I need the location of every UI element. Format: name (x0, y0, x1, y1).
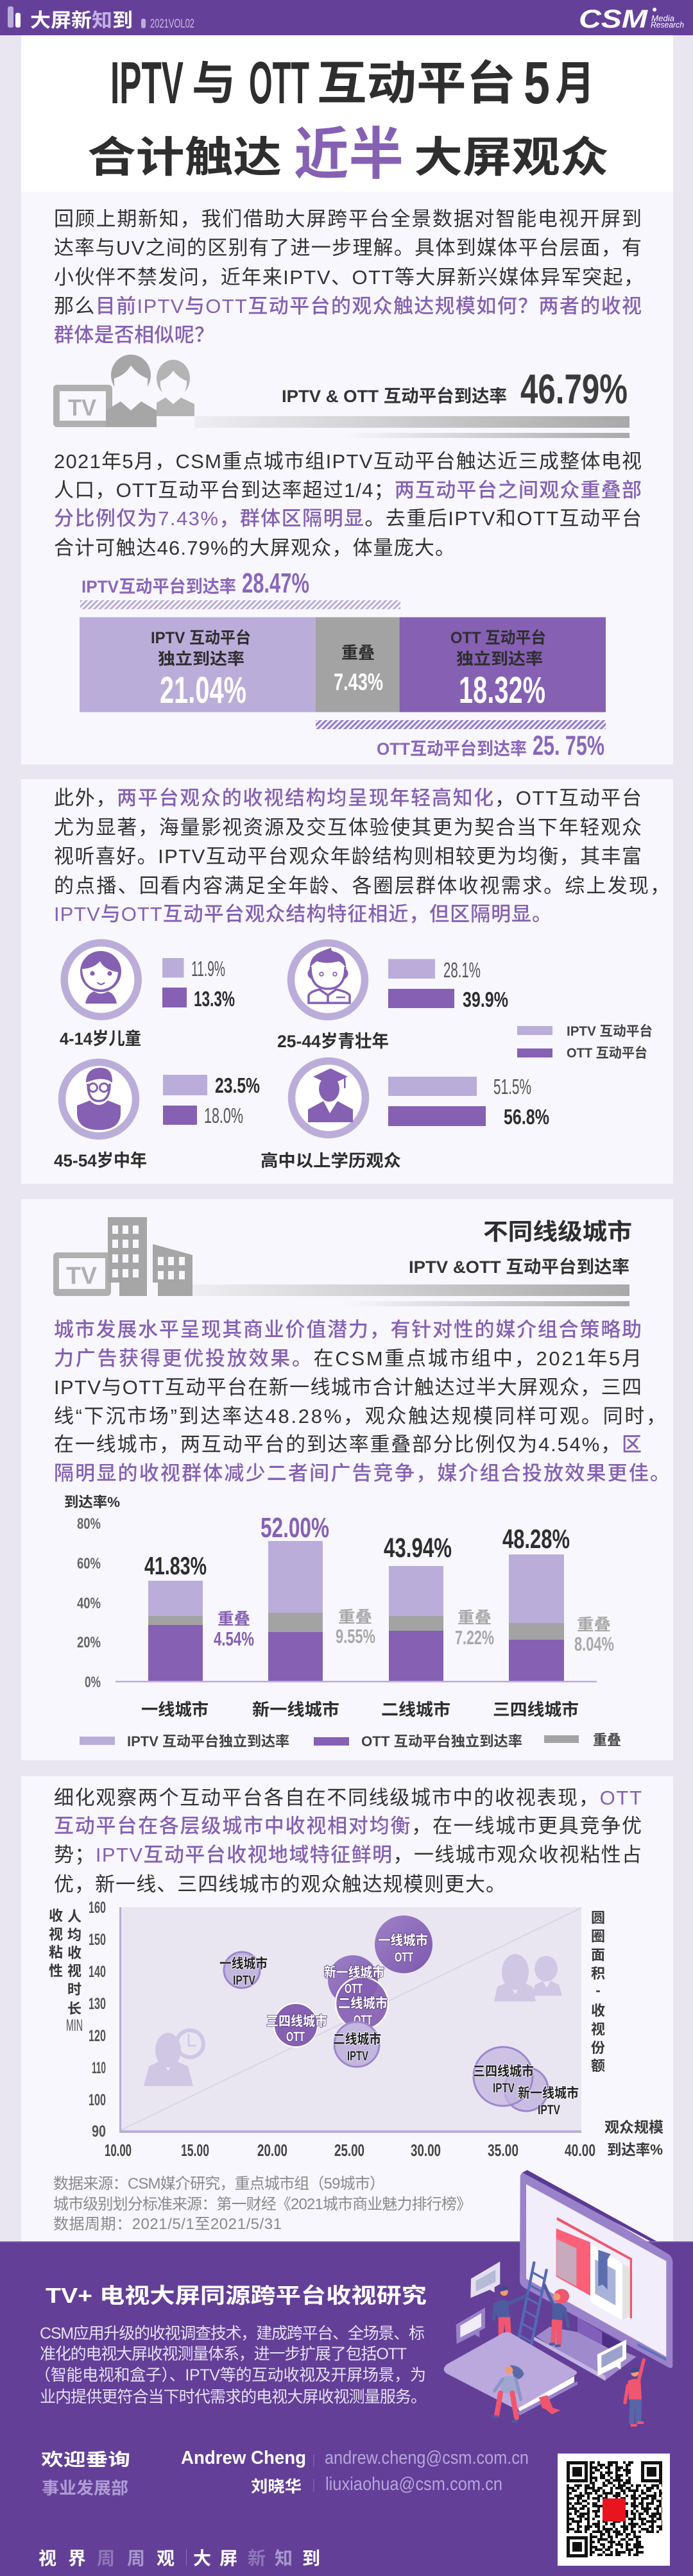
issue number: 2021VOL02 (150, 17, 194, 31)
intro paragraph: 回顾上期新知，我们借助大屏跨平台全景数据对智能电视开屏到 (54, 208, 642, 230)
icon: graduate (291, 1061, 366, 1135)
CSM logo: Research (651, 20, 684, 29)
contact: Liu Xiaohua: 刘晓华 (251, 2478, 302, 2496)
paragraph: stickiness (54, 1787, 642, 1896)
bubble: tier 3-4 OTT (266, 2003, 327, 2047)
bar: new tier 1 cities (261, 1512, 375, 1681)
y axis ticks: 160 (89, 1899, 106, 1917)
series name: 大屏新知到 (30, 10, 133, 31)
data sources: 城市级别划分标准来源：第一财经《2021城市商业魅力排行榜》 (53, 2196, 472, 2213)
contact: Andrew Cheng: andrew.cheng@csm.com.cn (325, 2448, 529, 2468)
decorative gradient bars (194, 416, 629, 438)
contact heading (41, 2450, 130, 2498)
x axis labels: 一线城市 (141, 1700, 209, 1719)
x axis ticks: 30.00 (411, 2141, 441, 2160)
title line 1: OTT (249, 49, 309, 116)
group: middle-aged 45-54: 18.0% (204, 1104, 243, 1127)
bubble: tier 3-4 OTT: 三四线城市 (266, 2014, 327, 2029)
panel: scale and stickiness (21, 1776, 673, 2241)
right axis title: bubble area: 份 (591, 2040, 605, 2056)
ladder (518, 2262, 547, 2349)
bar: new tier 1 cities: 52.00% (261, 1512, 329, 1544)
y axis labels: 60% (77, 1555, 101, 1572)
icon: viewer with clock (144, 2030, 203, 2086)
label: 25-44岁青壮年 (277, 1032, 389, 1051)
bar: tier 2 cities: 重叠 (458, 1609, 492, 1627)
footer panel (0, 2241, 693, 2576)
legend: platforms: IPTV 互动平台 (567, 1023, 653, 1039)
y axis labels: 40% (77, 1595, 101, 1612)
label: 4-14岁儿童 (60, 1029, 141, 1048)
icon: two viewers (494, 1954, 562, 2001)
bubble: tier 2 OTT: OTT (354, 2013, 372, 2028)
x axis title: 到达率% (607, 2141, 663, 2158)
bubble: tier 2 IPTV: IPTV (347, 2049, 368, 2064)
icon: child (64, 943, 138, 1016)
title line 1: 月 (555, 58, 595, 110)
footer description: 业内提供更符合当下时代需求的电视大屏收视测量服务。 (40, 2388, 427, 2406)
y axis ticks: 110 (92, 2059, 106, 2077)
x axis title (604, 2119, 663, 2158)
QR code (558, 2454, 670, 2566)
intro paragraph: 那么目前IPTV与OTT互动平台的观众触达规模如何？两者的收视 (54, 295, 642, 317)
x axis title: 观众规模 (604, 2119, 663, 2135)
bar: tier 2 cities (384, 1533, 494, 1681)
bar: tier 1 cities: 重叠 (218, 1610, 250, 1628)
y axis labels (77, 1515, 101, 1691)
y axis labels: 80% (77, 1515, 101, 1533)
stacked bar chart: reach by city tier (64, 1494, 621, 1749)
bubble: tier 2 IPTV (333, 2022, 381, 2067)
plot area (119, 1907, 581, 2133)
segment: OTT only: 独立到达率 (456, 650, 543, 668)
segment: IPTV only: 21.04% (160, 669, 246, 711)
group: high school and above (261, 1061, 549, 1170)
paragraph: city tiers: IPTV与OTT互动平台在新一线城市合计触达过半大屏观众，三四 (54, 1376, 642, 1399)
x axis ticks: 20.00 (257, 2141, 287, 2160)
panel: total reach (21, 192, 673, 764)
data sources (53, 2175, 472, 2233)
footer heading: TV+ 电视大屏同源跨平台收视研究 (46, 2284, 427, 2307)
left axis title: stickiness: 长 (67, 2001, 81, 2017)
right axis title: bubble area (591, 1910, 605, 2074)
contact: Liu Xiaohua: liuxiaohua@csm.com.cn (325, 2474, 502, 2495)
panel: audience structure (21, 779, 673, 1184)
group: adults 25-44 (277, 943, 508, 1051)
bubble: tier 2 OTT: 新一线城市 (324, 1965, 384, 1980)
right axis title: bubble area: 收 (591, 2003, 605, 2019)
bar: tier 1 cities: 4.54% (214, 1628, 254, 1650)
title line 1: 与 (192, 58, 235, 110)
bubble: tier 1 OTT: OTT (395, 1950, 413, 1965)
title line 1: 5 (524, 49, 550, 116)
OTT total reach label: 25. 75% (533, 730, 604, 761)
OTT total reach label (377, 730, 604, 761)
segment: overlap: 重叠 (341, 643, 375, 662)
right axis title: bubble area: 积 (591, 1966, 605, 1982)
paragraph: reach and overlap: 人口，OTT互动平台到达率超过1/4；两互动平台之间观众重叠部 (54, 479, 642, 501)
footer description: CSM应用升级的收视调查技术，建成跨平台、全场景、标 (40, 2325, 425, 2343)
monitor stand and base (533, 2317, 637, 2381)
paragraph: reach and overlap: 2021年5月，CSM重点城市组IPTV互动平台触达近三成整体电视 (54, 450, 642, 473)
left axis title: stickiness: 均 (67, 1927, 81, 1943)
icon: TV and two viewers: TV (68, 394, 96, 421)
paragraph: stickiness: 优，新一线、三四线城市的观众触达规模则更大。 (54, 1873, 506, 1896)
left axis title: stickiness: 性 (49, 1963, 63, 1979)
y axis title: 到达率% (64, 1494, 120, 1510)
left axis title: stickiness: 收 (49, 1908, 63, 1924)
left axis title: stickiness: 人 (67, 1908, 81, 1924)
bubble: tier 3-4 IPTV: 三四线城市 (473, 2064, 534, 2079)
right axis title: bubble area: 圈 (591, 1928, 605, 1944)
y axis labels: 0% (85, 1674, 101, 1691)
paragraph: reach and overlap: 合计可触达46.79%的大屏观众，体量庞大。 (54, 537, 455, 559)
y axis ticks: 120 (89, 2027, 106, 2045)
paragraph: audience structure: IPTV与OTT互动平台观众结构特征相近，但区隔明显。 (54, 903, 552, 925)
segment: OTT only: OTT 互动平台 (450, 628, 546, 647)
paragraph: stickiness: 细化观察两个互动平台各自在不同线级城市中的收视表现，OTT (54, 1787, 642, 1809)
title line 1: IPTV (110, 49, 184, 116)
paragraph: audience structure: 此外，两平台观众的收视结构均呈现年轻高知化，OTT互动平台 (54, 787, 642, 809)
footer slogan: 大屏 新 知 到 (193, 2548, 320, 2568)
segment: IPTV only (80, 617, 316, 712)
paragraph: city tiers: 力广告获得更优投放效果。在CSM重点城市组中，2021年5月 (54, 1347, 642, 1370)
x axis ticks: 40.00 (565, 2141, 595, 2160)
x axis labels: 二线城市 (381, 1700, 450, 1719)
y axis ticks (89, 1899, 106, 2141)
contact: Andrew Cheng: Andrew Cheng (181, 2448, 306, 2468)
illustration: monitor, book and people (444, 2170, 672, 2427)
left axis title: stickiness (49, 1908, 83, 2035)
total reach value: 46.79% (520, 366, 628, 412)
bar: tier 1 cities (144, 1553, 254, 1681)
paragraph: city tiers: 线“下沉市场”到达率达48.28%，观众触达规模同样可观。同时， (54, 1405, 666, 1427)
segment: IPTV only: IPTV 互动平台 (151, 628, 251, 647)
group: middle-aged 45-54: 23.5% (215, 1073, 260, 1097)
data sources: 数据周期：2021/5/1至2021/5/31 (53, 2216, 282, 2233)
bar: tier 3-4 cities: 重叠 (577, 1616, 611, 1634)
title line 1: 互动平台 (317, 58, 516, 110)
left axis title: stickiness: 视 (49, 1926, 63, 1942)
bubble: new tier 1 IPTV (504, 2067, 548, 2111)
legend: platforms (517, 1023, 653, 1061)
paragraph: audience structure: 尤为显著，海量影视资源及交互体验使其更为契合当下年轻观众 (54, 816, 642, 839)
footer description: 准化的电视大屏收视测量体系，进一步扩展了包括OTT (40, 2345, 407, 2363)
bar: tier 2 cities: 7.22% (455, 1626, 494, 1649)
paragraph: stickiness: 互动平台在各层级城市中收视相对均衡，在一线城市更具竞争优 (54, 1815, 642, 1837)
bubble: tier 2 OTT (324, 1965, 388, 2030)
legend: IPTV 互动平台独立到达率 (127, 1733, 289, 1749)
subheading: IPTV &OTT 互动平台到达率 (409, 1257, 629, 1277)
bar: tier 3-4 cities (502, 1524, 614, 1681)
title line 2: 合计触达 (87, 133, 282, 181)
icon: TV and city buildings (53, 1217, 193, 1296)
bubble: tier 1 IPTV (219, 1952, 268, 1988)
footer slogan: 视界 周 周 观 (38, 2548, 175, 2568)
legend: OTT 互动平台独立到达率 (361, 1733, 522, 1749)
IPTV total reach label: 28.47% (242, 568, 309, 599)
data sources: 数据来源：CSM媒介研究，重点城市组（59城市） (53, 2175, 385, 2193)
contact heading: 事业发展部 (42, 2479, 128, 2498)
panel: title (21, 35, 673, 192)
person: woman with red hair (544, 2285, 569, 2347)
legend: 重叠 (593, 1732, 621, 1748)
OTT total reach label: OTT互动平台到达率 (377, 739, 527, 759)
left axis title: stickiness: MIN (66, 2016, 83, 2035)
y axis ticks: 130 (89, 1995, 106, 2013)
bubble: tier 3-4 IPTV: 新一线城市 (518, 2085, 579, 2101)
bar: tier 3-4 cities: 48.28% (502, 1524, 570, 1554)
bar: new tier 1 cities: 重叠 (338, 1608, 372, 1626)
group: high school and above: 56.8% (504, 1105, 549, 1129)
y axis ticks: 140 (89, 1963, 106, 1981)
bubble: tier 3-4 IPTV (473, 2047, 579, 2117)
bar: tier 1 cities: 41.83% (144, 1553, 207, 1580)
IPTV total reach label (81, 568, 309, 599)
x axis ticks: 10.00 (105, 2141, 132, 2160)
segment: OTT only (400, 617, 606, 712)
paragraph: reach and overlap (54, 450, 642, 559)
x axis ticks: 35.00 (488, 2141, 518, 2160)
paragraph: city tiers (54, 1318, 670, 1485)
segment: OTT only: 18.32% (459, 669, 545, 711)
intro paragraph: 小伙伴不禁发问，近年来IPTV、OTT等大屏新兴媒体异军突起， (54, 266, 644, 289)
bubble: tier 2 OTT: 二线城市 (338, 1996, 388, 2011)
icon: TV and city buildings: TV (66, 1263, 98, 1290)
segment: overlap: 7.43% (334, 669, 383, 695)
segment: overlap (316, 617, 400, 712)
group: children 4-14: 13.3% (194, 987, 235, 1011)
bubble: tier 1 IPTV: IPTV (233, 1973, 255, 1988)
left axis title: stickiness: 时 (67, 1982, 81, 1998)
bubble: new tier 1 OTT (328, 1955, 378, 2005)
legend: platforms: OTT 互动平台 (567, 1045, 647, 1061)
intro paragraph: 群体是否相似呢？ (54, 324, 214, 346)
person: man waving (625, 2360, 644, 2427)
group: children 4-14 (60, 943, 235, 1048)
x axis ticks (105, 2141, 595, 2160)
icon: middle-aged person with glasses (62, 1062, 136, 1136)
label: 45-54岁中年 (54, 1151, 147, 1170)
paragraph: reach and overlap: 分比例仅为7.43%，群体区隔明显。去重后IPTV和OTT互动平台 (54, 507, 642, 530)
title line 1 (110, 49, 595, 116)
paragraph: audience structure: 的点播、回看内容满足全年龄、各圈层群体收视需求。综上发现， (54, 875, 670, 897)
heading: 不同线级城市 (483, 1218, 632, 1245)
paragraph: audience structure: 视听喜好。IPTV互动平台观众年龄结构则相较更为均衡，其丰富 (54, 845, 642, 868)
speech bubbles (456, 2262, 626, 2376)
y axis labels: 20% (77, 1634, 101, 1651)
contact: Liu Xiaohua (251, 2474, 502, 2496)
bar: tier 3-4 cities: 8.04% (574, 1633, 614, 1655)
left axis title: stickiness: 粘 (49, 1944, 63, 1960)
icon: TV and two viewers (53, 355, 194, 427)
bubble: tier 1 OTT (375, 1915, 432, 1973)
icon: young adult (291, 943, 364, 1017)
segmented reach bar (80, 617, 606, 712)
person: man holding ladder (493, 2286, 526, 2345)
left axis title: stickiness: 视 (67, 1963, 81, 1979)
label: 高中以上学历观众 (261, 1151, 401, 1170)
open book on screen (556, 2217, 632, 2320)
x axis labels (141, 1700, 579, 1719)
right axis title: bubble area: - (595, 1982, 601, 1998)
x axis labels: 三四线城市 (493, 1700, 579, 1719)
segment: IPTV only: 独立到达率 (158, 650, 244, 668)
y axis ticks: 150 (89, 1931, 106, 1949)
right axis title: bubble area: 圆 (591, 1910, 605, 1926)
title line 2: 近半 (294, 122, 404, 186)
paragraph: stickiness: 势；IPTV互动平台收视地域特征鲜明，一线城市观众收视粘性占 (54, 1844, 642, 1866)
panel: city tiers (21, 1199, 673, 1760)
x axis ticks: 15.00 (181, 2141, 209, 2160)
footer slogan (38, 2548, 320, 2568)
footer description (35, 2325, 427, 2406)
header bar (0, 0, 693, 35)
paragraph: city tiers: 城市发展水平呈现其商业价值潜力，有针对性的媒介组合策略助 (54, 1318, 642, 1341)
large book platform (444, 2332, 578, 2416)
bubble: tier 3-4 IPTV: IPTV (493, 2081, 515, 2096)
y axis ticks: 90 (92, 2123, 106, 2141)
bubble: tier 1 OTT: 一线城市 (378, 1933, 428, 1948)
bubble: tier 3-4 IPTV: IPTV (538, 2103, 560, 2117)
group: high school and above: 51.5% (493, 1075, 531, 1099)
person: seated woman (492, 2365, 524, 2423)
title line 2: 大屏观众 (414, 133, 609, 181)
right axis title: bubble area: 额 (591, 2058, 605, 2074)
bubble: tier 3-4 OTT: OTT (286, 2030, 305, 2044)
IPTV total reach label: IPTV互动平台到达率 (81, 577, 236, 596)
bar: new tier 1 cities: 9.55% (336, 1625, 375, 1647)
monitor (520, 2170, 672, 2368)
group: adults 25-44: 28.1% (443, 958, 481, 982)
contact: Andrew Cheng (181, 2448, 529, 2468)
title line 2 (87, 122, 609, 186)
CSM logo (579, 5, 684, 33)
bubble: tier 2 OTT: OTT (345, 1982, 363, 1996)
group: children 4-14: 11.9% (191, 957, 225, 981)
y axis ticks: 100 (89, 2091, 106, 2109)
x axis labels: 新一线城市 (252, 1700, 339, 1719)
left axis title: stickiness: 收 (67, 1945, 81, 1961)
paragraph: city tiers: 隔明显的收视群体减少二者间广告竞争，媒介组合投放效果更佳。 (54, 1462, 670, 1485)
legend (80, 1732, 621, 1749)
decorative gradient bars (193, 1284, 629, 1306)
group: adults 25-44: 39.9% (463, 988, 508, 1011)
x axis ticks: 25.00 (334, 2141, 364, 2160)
intro paragraph (54, 208, 644, 346)
bar: tier 2 cities: 43.94% (384, 1533, 452, 1563)
paragraph: audience structure (54, 787, 670, 925)
group: middle-aged 45-54 (54, 1062, 260, 1170)
intro paragraph: 达率与UV之间的区别有了进一步理解。具体到媒体平台层面，有 (54, 237, 642, 259)
bubble: tier 1 IPTV: 一线城市 (219, 1956, 268, 1971)
footer description: （智能电视和盒子）、IPTV等的互动收视及开屏场景，为 (35, 2366, 426, 2384)
total reach label: IPTV & OTT 互动平台到达率 (282, 386, 507, 406)
bubble: tier 2 IPTV: 二线城市 (333, 2032, 381, 2047)
contact heading: 欢迎垂询 (41, 2450, 130, 2470)
right axis title: bubble area: 视 (591, 2021, 605, 2037)
paragraph: city tiers: 在一线城市，两互动平台的到达率重叠部分比例仅为4.54%，区 (54, 1433, 642, 1456)
right axis title: bubble area: 面 (591, 1947, 605, 1963)
CSM logo: Media (651, 13, 674, 23)
CSM logo: CSM (579, 5, 649, 33)
bubble chart: reach vs viewing time (49, 1899, 663, 2160)
